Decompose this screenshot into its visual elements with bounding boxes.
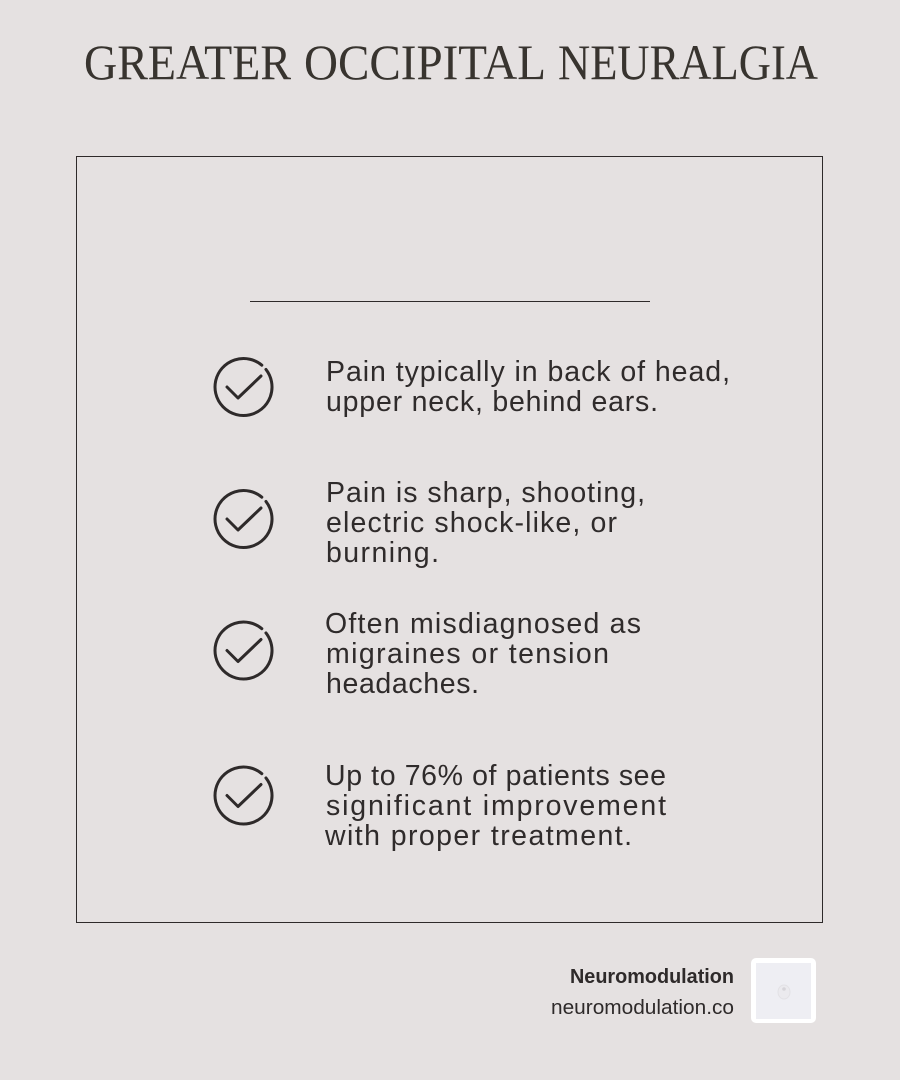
panel: symptoms frame	[76, 156, 822, 922]
text: pain location	[326, 356, 730, 418]
title: OCCIPITAL	[304, 34, 546, 90]
text: pain location: upper neck, behind ears.	[326, 386, 658, 418]
item 2: pain quality	[215, 477, 645, 569]
title	[84, 34, 818, 90]
icon: check circle 2	[215, 491, 272, 548]
icon: check circle 1	[215, 359, 272, 416]
text: pain quality: burning.	[326, 537, 439, 569]
text: treatment outcome: significant improvement	[326, 790, 666, 822]
text: pain location: Pain typically in back of head,	[326, 356, 730, 388]
text: pain quality: electric shock-like, or	[326, 507, 618, 539]
text: misdiagnosis: headaches.	[326, 668, 479, 700]
brand name: Neuromodulation	[570, 966, 734, 988]
title: GREATER	[84, 34, 292, 90]
item 4: treatment outcome	[215, 760, 666, 852]
item 3: misdiagnosis	[215, 608, 641, 700]
icon: check circle 4	[215, 767, 272, 824]
text: treatment outcome: with proper treatment.	[324, 820, 632, 852]
text: pain quality: Pain is sharp, shooting,	[326, 477, 645, 509]
footer brand	[551, 958, 816, 1023]
text: misdiagnosis: migraines or tension	[326, 638, 609, 670]
brand url: neuromodulation.co	[551, 996, 734, 1019]
logo tile	[751, 958, 816, 1023]
text: misdiagnosis: Often misdiagnosed as	[325, 608, 641, 640]
text: pain quality	[326, 477, 645, 569]
text: treatment outcome: Up to 76% of patients see	[325, 760, 666, 792]
item 1: pain location	[215, 356, 730, 418]
text: misdiagnosis	[325, 608, 641, 700]
title: NEURALGIA	[558, 34, 818, 90]
icon: check circle 3	[215, 622, 272, 679]
text: treatment outcome	[324, 760, 666, 852]
